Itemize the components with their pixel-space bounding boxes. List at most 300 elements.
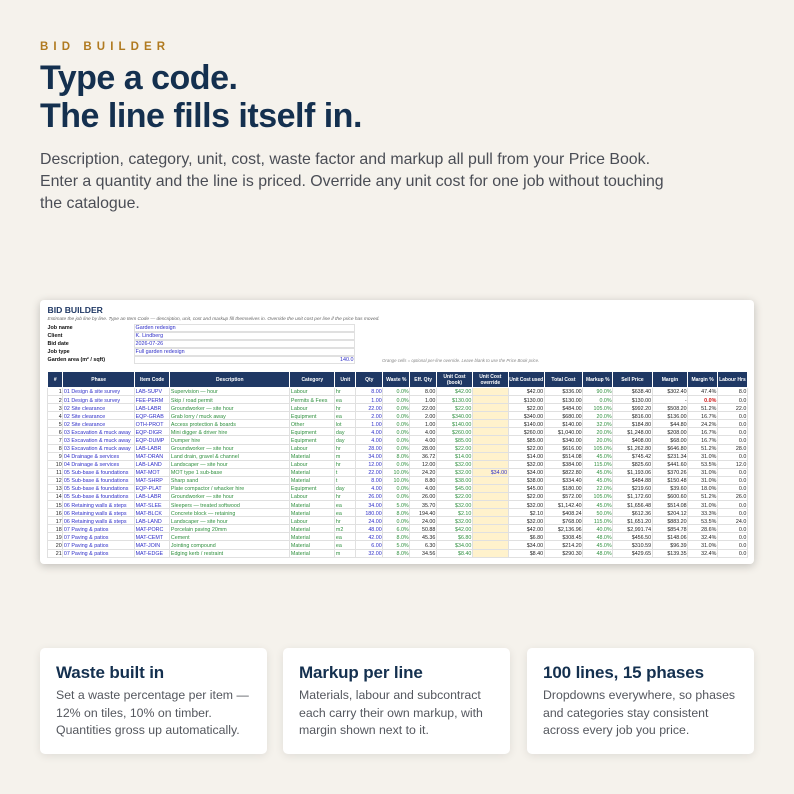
bid line items table: 06 Retaining walls & steps <box>64 519 127 525</box>
bid line items table: Jointing compound <box>171 543 216 549</box>
bid line items table: $340.00 <box>452 414 471 420</box>
bid line items table: 6.0% <box>396 527 409 533</box>
bid line items table: EQP-GRAB <box>136 414 164 420</box>
bid line items table: 36.72 <box>422 454 435 460</box>
bid line items table: $768.00 <box>562 519 582 525</box>
bid line items table: 0.0 <box>739 422 746 428</box>
bid line items table: t <box>336 478 337 484</box>
bid line items table: MAT-MOT <box>136 470 160 476</box>
bid line items table: 48.0% <box>596 551 612 557</box>
bid line items table: day <box>336 438 344 444</box>
bid line items table: $441.60 <box>667 462 687 468</box>
bid line items table: 42.00 <box>368 535 382 541</box>
bid line items table: 105.0% <box>594 406 612 412</box>
bid line items table: 0.0% <box>396 446 409 452</box>
bid line items table: 07 Paving & patios <box>64 535 108 541</box>
bid line items table: Grab lorry / muck away <box>171 414 226 420</box>
bid line items table: 0.0 <box>739 454 746 460</box>
bid line items table: 0.0 <box>739 430 746 436</box>
bid line items table: Labour Hrs <box>719 376 746 382</box>
bid line items table: $2.10 <box>458 511 471 517</box>
bid line items table: $825.60 <box>632 462 651 468</box>
bid line items table: 45.36 <box>422 535 435 541</box>
bid line items table: 90.0% <box>596 389 612 395</box>
bid line items table: $42.00 <box>527 389 543 395</box>
bid line items table: 0.0% <box>396 494 409 500</box>
bid line items table: 11 <box>56 470 62 476</box>
bid line items table: Phase <box>91 376 106 382</box>
bid line items table: 26.00 <box>368 494 382 500</box>
bid line items table: $140.00 <box>562 422 582 428</box>
bid line items table: $219.60 <box>632 486 651 492</box>
job details form: Full garden redesign <box>136 348 185 354</box>
bid line items table: 02 Site clearance <box>64 406 105 412</box>
bid line items table: Cement <box>171 535 190 541</box>
bid line items table: 20 <box>56 543 62 549</box>
bid line items table: Labour <box>291 494 308 500</box>
job details form: 2026-07-26 <box>136 340 163 346</box>
bid line items table: 05 Sub-base & foundations <box>64 486 128 492</box>
bid line items table: 0.0% <box>396 438 409 444</box>
bid line items table: $22.00 <box>455 494 471 500</box>
bid line items table: hr <box>336 446 341 452</box>
card text <box>299 688 483 737</box>
bid line items table: $572.00 <box>562 494 582 500</box>
bid line items table: Equipment <box>291 486 316 492</box>
card text: margin shown next to it. <box>299 723 429 737</box>
bid line items table: $8.40 <box>530 551 543 557</box>
card heading: 100 lines, 15 phases <box>543 663 704 682</box>
bid line items table: 194.40 <box>419 511 435 517</box>
bid line items table: 0.0% <box>396 414 409 420</box>
bid line items table: $44.80 <box>670 422 687 428</box>
bid line items table: 4.00 <box>425 430 435 436</box>
override note: Orange cells = optional per-line override. Leave blank to use the Price Book price. <box>382 358 539 362</box>
bid line items table: 8.0% <box>396 535 409 541</box>
bid line items table: 16.7% <box>701 430 716 436</box>
bid line items table: 5.0% <box>396 503 409 509</box>
bid line items table: Groundworker — site hour <box>171 406 234 412</box>
bid line items table: $334.40 <box>562 478 582 484</box>
bid line items table: Qty <box>365 376 373 382</box>
bid line items table: hr <box>336 389 341 395</box>
bid line items table: 05 Sub-base & foundations <box>64 494 128 500</box>
bid line items table: 22.00 <box>368 470 382 476</box>
bid line items table: 1.00 <box>425 398 435 404</box>
job details form: Client <box>48 332 62 338</box>
bid line items table: ea <box>336 414 342 420</box>
bid line items table: 3 <box>59 406 62 412</box>
bid line items table: 20.0% <box>596 430 612 436</box>
bid line items table: 16.7% <box>701 438 716 444</box>
bid line items table: 0.0% <box>396 422 409 428</box>
bid line items table: 31.0% <box>701 503 716 509</box>
bid line items table: LAB-LABR <box>136 406 161 412</box>
card text: Set a waste percentage per item — <box>56 688 249 702</box>
bid line items table: $34.00 <box>455 543 471 549</box>
bid line items table: 50.88 <box>422 527 435 533</box>
bid line items table: 18 <box>56 527 62 533</box>
bid line items table: $514.08 <box>667 503 687 509</box>
bid line items table: Groundworker — site hour <box>171 494 234 500</box>
bid line items table: FEE-PERM <box>136 398 163 404</box>
bid line items table: Porcelain paving 20mm <box>171 527 227 533</box>
spreadsheet instructions: Estimate the job line by line. Type an Item Code — description, unit, cost and markup fill themselves in. Override the unit cost per line if the price has moved. <box>48 317 380 322</box>
bid line items table: day <box>336 486 344 492</box>
bid line items table: - <box>685 398 687 404</box>
bid line items table: 32.4% <box>701 551 716 557</box>
card text: 12% on tiles, 10% on timber. <box>56 706 212 720</box>
card heading: Waste built in <box>56 663 164 682</box>
job details form: Job name <box>48 324 73 330</box>
bid line items table: 0.0 <box>739 543 746 549</box>
job details form: Garden redesign <box>136 324 176 330</box>
bid line items table: Labour <box>291 406 308 412</box>
bid line items table: Item Code <box>140 376 164 382</box>
bid line items table: Eff. Qty <box>414 376 432 382</box>
bid line items table: 34.00 <box>368 503 382 509</box>
job details form: K. Lindberg <box>136 332 163 338</box>
bid line items table: $6.80 <box>530 535 543 541</box>
bid line items table: $32.00 <box>455 470 471 476</box>
bid line items table: $42.00 <box>455 527 471 533</box>
bid line items table: 07 Paving & patios <box>64 551 108 557</box>
card text: Dropdowns everywhere, so phases <box>543 688 735 702</box>
title: The line fills itself in. <box>40 97 362 135</box>
bid line items table: 0.0% <box>396 406 409 412</box>
bid line items table: $1,262.80 <box>627 446 651 452</box>
bid line items table: 32.0% <box>596 422 612 428</box>
bid line items table: Access protection & boards <box>171 422 236 428</box>
bid line items table: $638.40 <box>632 389 651 395</box>
bid line items table: 8.80 <box>425 478 435 484</box>
bid line items table: 45.0% <box>596 503 612 509</box>
bid line items table: 21 <box>56 551 62 557</box>
bid line items table: $42.00 <box>527 527 543 533</box>
job details form: 140.0 <box>340 356 354 362</box>
bid line items table: 5 <box>59 422 62 428</box>
bid line items table: Material <box>291 551 310 557</box>
bid line items table: 0.0% <box>599 398 612 404</box>
bid line items table: 0.0% <box>396 519 409 525</box>
bid line items table: $85.00 <box>455 438 471 444</box>
bid line items table: $45.00 <box>455 486 471 492</box>
bid line items table: 0.0 <box>739 511 746 517</box>
bid line items table: $2,136.96 <box>558 527 582 533</box>
bid line items table: $2,991.74 <box>627 527 651 533</box>
bid line items table: 10 <box>56 462 62 468</box>
bid line items table: 2.00 <box>425 414 435 420</box>
bid line items table: Equipment <box>291 438 316 444</box>
bid line items table: 03 Excavation & muck away <box>64 438 131 444</box>
bid line items table: $508.20 <box>667 406 687 412</box>
bid line items table: $370.26 <box>667 470 687 476</box>
bid line items table: 31.0% <box>701 478 716 484</box>
bid line items table: $854.78 <box>667 527 687 533</box>
bid line items table: $22.00 <box>527 446 543 452</box>
bid line items table: $32.00 <box>527 519 543 525</box>
bid line items table: 32.4% <box>701 535 716 541</box>
bid line items table: 8.0 <box>739 389 746 395</box>
bid line items table: 0.0 <box>739 414 746 420</box>
bid line items table: 05 Sub-base & foundations <box>64 470 128 476</box>
bid line items table: 34.00 <box>368 454 382 460</box>
bid line items table: 40.0% <box>596 527 612 533</box>
bid line items table: $2.10 <box>530 511 543 517</box>
card text <box>56 688 249 737</box>
bid line items table: 32.00 <box>368 551 382 557</box>
bid line items table: $214.20 <box>562 543 582 549</box>
bid line items table: 31.0% <box>701 543 716 549</box>
bid line items table: 8.0% <box>396 511 409 517</box>
bid line items table: 53.5% <box>701 519 716 525</box>
bid line items table: 1 <box>59 389 62 395</box>
bid line items table: 24.20 <box>422 470 435 476</box>
bid line items table: Unit Cost used <box>509 376 543 382</box>
bid line items table: $208.00 <box>667 430 687 436</box>
bid line items table: 0.0 <box>739 535 746 541</box>
spreadsheet heading: BID BUILDER <box>48 304 103 314</box>
bid line items table: 0.0% <box>396 486 409 492</box>
bid line items table: LAB-LABR <box>136 494 161 500</box>
bid line items table: 26.0 <box>736 494 746 500</box>
bid line items table: ea <box>336 543 342 549</box>
bid line items table: $612.36 <box>632 511 651 517</box>
bid line items table: Sharp sand <box>171 478 198 484</box>
bid line items table: 28.6% <box>701 527 716 533</box>
bid line items table: $32.00 <box>455 462 471 468</box>
bid line items table: 8.00 <box>425 389 435 395</box>
card text: across every job you price. <box>543 723 689 737</box>
bid line items table: 53.5% <box>701 462 716 468</box>
bid line items table: hr <box>336 406 341 412</box>
bid line items table: Landscaper — site hour <box>171 519 228 525</box>
intro paragraph: Description, category, unit, cost, waste factor and markup all pull from your Price Book. <box>40 151 650 168</box>
bid line items table: 0.0 <box>739 438 746 444</box>
title <box>40 58 362 135</box>
bid line items table: $32.00 <box>527 503 543 509</box>
bid line items table: 50.0% <box>596 511 612 517</box>
bid line items table: 1.00 <box>371 422 382 428</box>
bid line items table: Labour <box>291 462 308 468</box>
bid line items table: 48.0% <box>596 535 612 541</box>
bid line items table: m <box>336 454 340 460</box>
bid line items table: 51.2% <box>701 406 716 412</box>
bid line items table: $68.00 <box>670 438 687 444</box>
bid line items table: $130.00 <box>632 398 651 404</box>
bid line items table: $34.00 <box>527 470 543 476</box>
bid line items table: 48.00 <box>368 527 382 533</box>
bid line items table: 20.0% <box>596 438 612 444</box>
bid line items table: ea <box>336 535 342 541</box>
bid line items table: 34.56 <box>422 551 435 557</box>
bid line items table: 47.4% <box>701 389 716 395</box>
bid line items table: 1.00 <box>371 398 382 404</box>
bid line items table: 01 Design & site survey <box>64 389 120 395</box>
bid line items table: $6.80 <box>458 535 471 541</box>
bid line items table: $745.42 <box>632 454 651 460</box>
bid line items table: $456.50 <box>632 535 651 541</box>
bid line items table: 45.0% <box>596 470 612 476</box>
card text: Materials, labour and subcontract <box>299 688 481 702</box>
bid line items table: $130.00 <box>452 398 471 404</box>
bid line items table: $139.35 <box>667 551 687 557</box>
bid line items table: 5.0% <box>396 543 409 549</box>
bid line items table: $38.00 <box>527 478 543 484</box>
bid line items table: Description <box>216 376 244 382</box>
bid line items table: 01 Design & site survey <box>64 398 120 404</box>
bid line items table: 04 Drainage & services <box>64 462 119 468</box>
bid line items table: $184.80 <box>632 422 651 428</box>
bid line items table: $1,142.40 <box>558 503 582 509</box>
bid line items table: 16 <box>56 511 62 517</box>
card text: Quantities gross up automatically. <box>56 723 240 737</box>
bid line items table: EQP-PLAT <box>136 486 162 492</box>
bid line items table: 02 Site clearance <box>64 422 105 428</box>
card: 100 lines, 15 phases <box>527 648 754 754</box>
bid line items table: 0.0% <box>396 389 409 395</box>
bid line items table: 0.0% <box>704 398 716 404</box>
bid line items table: 8.0% <box>396 551 409 557</box>
bid line items table: $1,040.00 <box>558 430 582 436</box>
bid line items table: $336.00 <box>562 389 582 395</box>
bid line items table: $38.00 <box>455 478 471 484</box>
bid line items table: 105.0% <box>594 494 612 500</box>
bid line items table: 06 Retaining walls & steps <box>64 503 127 509</box>
bid line items table: LAB-LABR <box>136 446 161 452</box>
bid line items table: 06 Retaining walls & steps <box>64 511 127 517</box>
bid line items table: 1.00 <box>425 422 435 428</box>
bid line items table: 9 <box>59 454 62 460</box>
bid line items table: MAT-PORC <box>136 527 163 533</box>
bid line items table: 4.00 <box>371 438 382 444</box>
bid line items table: $130.00 <box>524 398 543 404</box>
bid line items table: Material <box>291 527 310 533</box>
bid line items table: $32.00 <box>455 503 471 509</box>
bid line items table: $180.00 <box>562 486 582 492</box>
bid line items table: MAT-SHRP <box>136 478 163 484</box>
bid line items table: 115.0% <box>594 462 612 468</box>
bid line items table: 07 Paving & patios <box>64 543 108 549</box>
bid line items table: 04 Drainage & services <box>64 454 119 460</box>
bid line items table: Labour <box>291 389 308 395</box>
bid line items table: Unit Cost override <box>479 374 501 386</box>
bid line items table: LAB-LAND <box>136 462 162 468</box>
bid line items table: EQP-DIGR <box>136 430 162 436</box>
bid line items table: $22.00 <box>527 406 543 412</box>
bid line items table: 20.0% <box>596 414 612 420</box>
bid line items table: $646.80 <box>667 446 687 452</box>
bid line items table: $308.45 <box>562 535 582 541</box>
bid line items table: 0.0% <box>396 398 409 404</box>
bid line items table: $408.24 <box>562 511 582 517</box>
bid line items table: MAT-BLCK <box>136 511 162 517</box>
bid line items table: 45.0% <box>596 543 612 549</box>
card text <box>543 688 735 737</box>
bid line items table: $408.00 <box>632 438 651 444</box>
bid line items table: MAT-SLEE <box>136 503 162 509</box>
bid line items table: Labour <box>291 446 308 452</box>
bid line items table: Land drain, gravel & channel <box>171 454 239 460</box>
bid line items table: $992.20 <box>632 406 651 412</box>
bid line items table: MAT-EDGE <box>136 551 163 557</box>
bid line items table: LAB-LAND <box>136 519 162 525</box>
bid line items table: m <box>336 551 340 557</box>
bid line items table: $514.08 <box>562 454 582 460</box>
bid line items table: MAT-DRAN <box>136 454 163 460</box>
bid line items table: Plate compactor / whacker hire <box>171 486 244 492</box>
eyebrow label: BID BUILDER <box>40 40 170 52</box>
bid line items table: 22.0% <box>596 486 612 492</box>
bid line items table: Waste % <box>386 376 406 382</box>
bid line items table: $136.00 <box>667 414 687 420</box>
bid line items table: 17 <box>56 519 62 525</box>
bid line items table: Unit Cost (book) <box>443 374 466 386</box>
bid line items table: $150.48 <box>667 478 687 484</box>
card text: each carry their own markup, with <box>299 706 483 720</box>
job details form <box>48 324 355 364</box>
bid line items table: 03 Excavation & muck away <box>64 430 131 436</box>
bid line items table: Material <box>291 511 310 517</box>
bid line items table: 2 <box>59 398 62 404</box>
bid line items table: Equipment <box>291 414 316 420</box>
bid line items table: day <box>336 430 344 436</box>
bid line items table: MAT-CEMT <box>136 535 163 541</box>
bid line items table: Sleepers — treated softwood <box>171 503 240 509</box>
bid line items table: OTH-PROT <box>136 422 163 428</box>
bid line items table: $45.00 <box>527 486 543 492</box>
bid line items table: Dumper hire <box>171 438 200 444</box>
bid line items table: 12.00 <box>422 462 435 468</box>
bid line items table: Edging kerb / restraint <box>171 551 223 557</box>
bid line items table: $1,172.60 <box>627 494 651 500</box>
bid line items table: 05 Sub-base & foundations <box>64 478 128 484</box>
bid line items table: $96.39 <box>670 543 687 549</box>
bid line items table: $22.00 <box>455 446 471 452</box>
bid line items table: 10.0% <box>394 470 409 476</box>
bid line items table: 02 Site clearance <box>64 414 105 420</box>
bid line items table: 6 <box>59 430 62 436</box>
bid line items table: ea <box>336 511 342 517</box>
bid line items table: 45.0% <box>596 454 612 460</box>
bid line items table: 31.0% <box>701 470 716 476</box>
card heading: Markup per line <box>299 663 423 682</box>
bid line items table: 26.00 <box>422 494 435 500</box>
bid line items table: 24.0 <box>736 519 746 525</box>
bid line items table: 12 <box>56 478 62 484</box>
bid line items table: 03 Excavation & muck away <box>64 446 131 452</box>
bid line items table: $42.00 <box>455 389 471 395</box>
bid line items table: Other <box>291 422 304 428</box>
job details form: Bid date <box>48 340 69 346</box>
bid line items table: ea <box>336 398 342 404</box>
bid line items table: $14.00 <box>455 454 471 460</box>
bid line items table: Landscaper — site hour <box>171 462 228 468</box>
bid line items table: 0.0 <box>739 551 746 557</box>
bid line items table: $302.40 <box>667 389 687 395</box>
bid line items table: Total Cost <box>551 376 575 382</box>
bid line items table: $204.12 <box>667 511 687 517</box>
bid line items table: 13 <box>56 486 62 492</box>
bid line items table: 4.00 <box>371 430 382 436</box>
bid line items table: 16.7% <box>701 414 716 420</box>
bid line items table: 28.00 <box>368 446 382 452</box>
bid line items table: 6.30 <box>425 543 435 549</box>
bid line items table: $816.00 <box>632 414 651 420</box>
bid line items table: 105.0% <box>594 446 612 452</box>
card text: and categories stay consistent <box>543 706 708 720</box>
bid line items table: $85.00 <box>527 438 543 444</box>
